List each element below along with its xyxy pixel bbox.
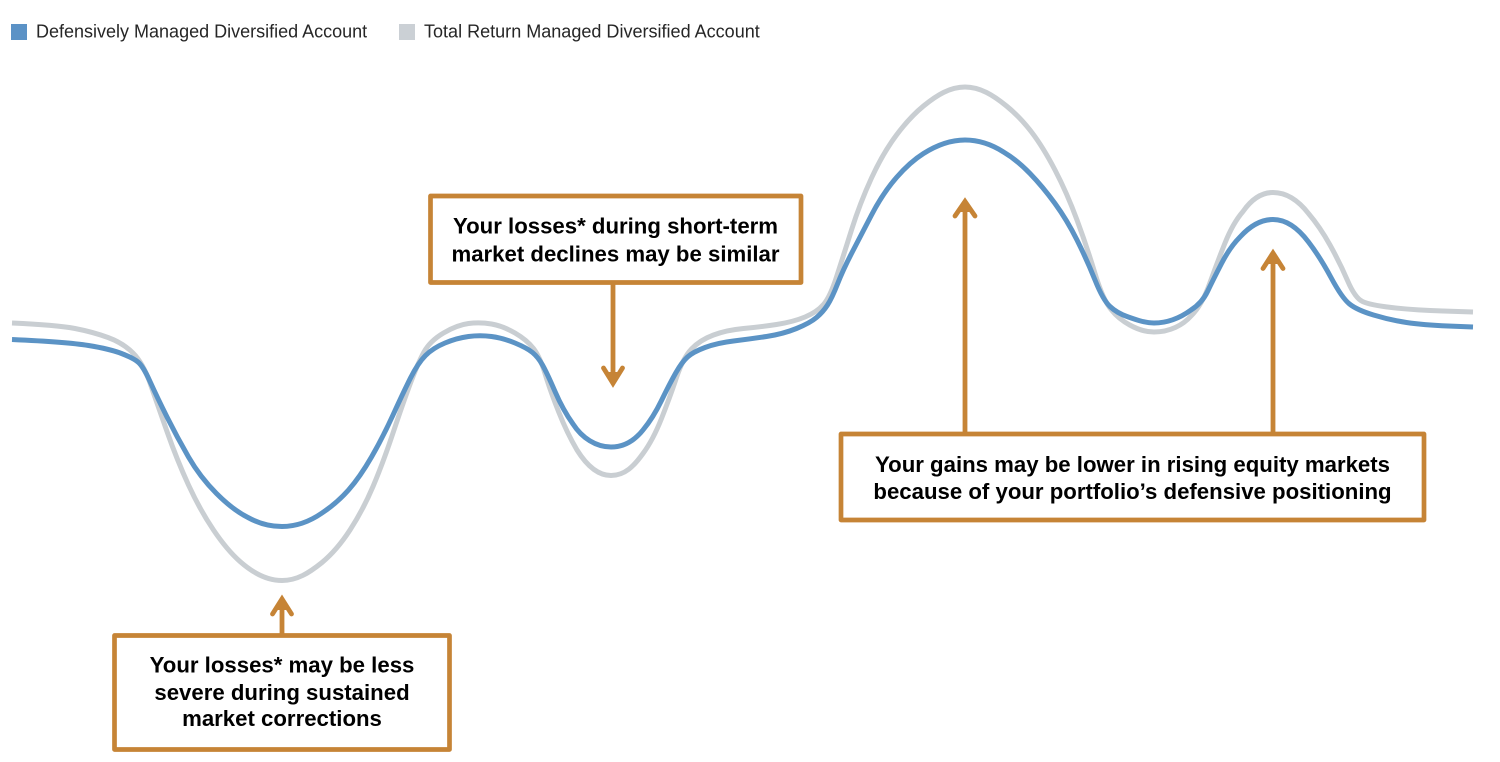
callout: short-term declines: Your losses* during short-term [453,214,778,238]
callout: sustained corrections [114,596,450,750]
arrow: up to small peak [1263,250,1283,433]
arrow: up to large trough [272,596,292,635]
arrow: down to short-term dip [604,284,622,386]
callout: sustained corrections: severe during sustained [154,680,410,705]
callout: short-term declines [430,196,801,386]
legend item: defensive: Defensively Managed Diversified Account [36,22,367,42]
callout: rising markets [841,199,1424,520]
callout: rising markets: because of your portfolio’s defensive positioning [873,479,1392,504]
arrow: up to large peak [955,199,975,433]
line: total return account [12,87,1473,580]
legend item: total return: Total Return Managed Diversified Account [424,22,760,42]
legend [11,22,760,42]
callout: sustained corrections: market corrections [182,706,382,731]
line: defensive account [12,140,1473,526]
callout: rising markets: Your gains may be lower in rising equity markets [875,452,1390,477]
callout: short-term declines: market declines may be similar [451,242,780,266]
callout: sustained corrections: Your losses* may be less [150,653,414,678]
